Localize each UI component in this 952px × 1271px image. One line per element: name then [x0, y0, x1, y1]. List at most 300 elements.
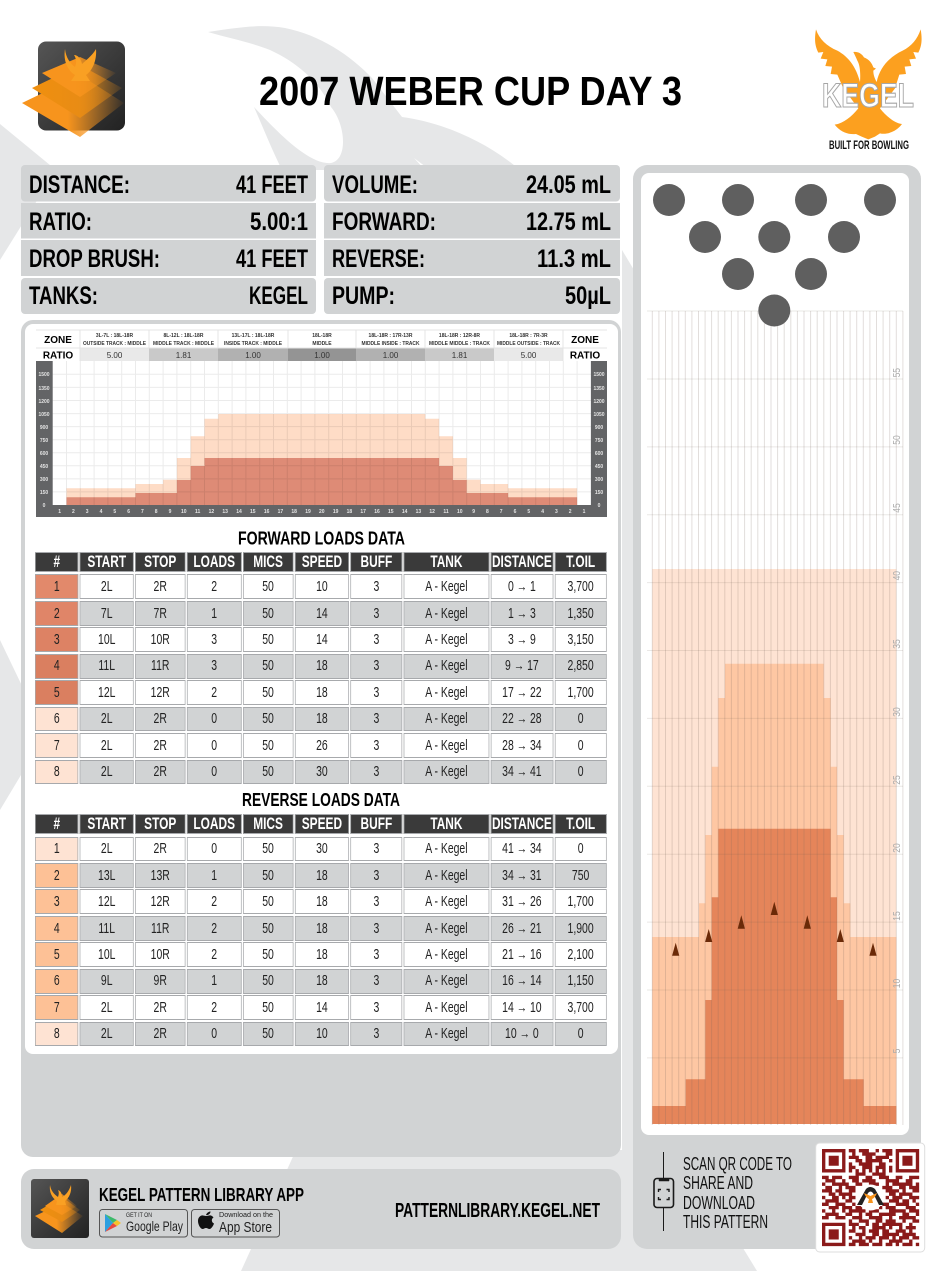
forward row 6: 0	[212, 711, 217, 727]
forward row 6: 2L	[101, 711, 113, 727]
lane distance scale: 45	[891, 503, 902, 513]
reverse row 4: 11R	[151, 921, 170, 937]
oil distribution bar chart: 18	[347, 509, 352, 515]
stats panel: pattern specs right column: 11.3 mL	[537, 245, 611, 273]
forward row 3	[35, 627, 607, 652]
forward row 1: 10	[316, 579, 328, 595]
oil distribution bar chart: 300	[595, 477, 603, 483]
zone and ratio header: 1.81	[176, 351, 192, 360]
reverse row 5: 3	[374, 947, 380, 963]
footer app icon	[31, 1179, 89, 1238]
forward table header: SPEED	[302, 553, 342, 571]
lane board lines	[652, 311, 903, 1125]
oil distribution bar chart: 1350	[593, 386, 605, 392]
oil distribution bar chart: 4	[100, 509, 103, 515]
reverse row 1: 50	[263, 841, 274, 857]
oil distribution bar chart: 19	[305, 509, 311, 515]
reverse row 2: 3	[374, 868, 380, 884]
reverse row 1: A - Kegel	[425, 841, 468, 857]
forward row 1: 50	[263, 579, 274, 595]
oil distribution bar chart: 7	[141, 509, 144, 515]
stats panel: pattern specs left column: 41 FEET	[236, 245, 308, 273]
oil distribution bar chart: 900	[40, 425, 48, 431]
forward row 4: 50	[263, 658, 274, 674]
forward row 4: 3	[212, 658, 217, 674]
oil distribution bar chart: 17	[278, 509, 283, 515]
forward row 3: 3 → 9	[508, 632, 536, 648]
oil distribution bar chart: 14	[402, 509, 408, 515]
zone and ratio header: 1.00	[245, 351, 261, 360]
reverse row 4: 2	[212, 921, 217, 937]
reverse table header: SPEED	[302, 815, 342, 833]
oil distribution bar chart: 13	[416, 509, 421, 515]
reverse table header: T.OIL	[566, 815, 595, 833]
oil distribution bar chart: 600	[595, 451, 603, 457]
oil distribution bar chart: 14	[236, 509, 242, 515]
reverse row 6: 50	[263, 973, 274, 989]
forward row 1: 0 → 1	[508, 579, 536, 595]
lane arrows	[672, 902, 877, 956]
forward row 1: A - Kegel	[425, 579, 468, 595]
forward row 2: 14	[316, 606, 328, 622]
reverse row 3: 1,700	[568, 894, 594, 910]
lane distance scale: 30	[891, 707, 902, 717]
reverse row 2: 50	[263, 868, 274, 884]
reverse row 8: 10	[316, 1026, 328, 1042]
oil distribution bar chart: 11	[195, 509, 200, 515]
oil distribution bar chart: 3	[86, 509, 89, 515]
forward row 6: 0	[578, 711, 584, 727]
reverse row 2: A - Kegel	[425, 868, 468, 884]
reverse table header: DISTANCE	[492, 815, 552, 833]
reverse row 7	[35, 995, 607, 1020]
forward row 7: 26	[316, 738, 328, 754]
reverse row 6: 9R	[154, 973, 167, 989]
zone and ratio header: ZONE	[44, 335, 72, 346]
oil distribution bar chart: 13	[222, 509, 228, 515]
reverse row 1	[35, 837, 607, 861]
forward row 2: 7R	[154, 606, 167, 622]
forward row 1: 2R	[154, 579, 167, 595]
reverse row 4: 18	[316, 921, 328, 937]
Kegel phoenix logo	[815, 29, 922, 152]
reverse row 8: 0	[212, 1026, 217, 1042]
stats panel: pattern specs right column: 50µL	[565, 282, 611, 310]
reverse table header: STOP	[144, 815, 177, 833]
stats panel: pattern specs left column: TANKS:	[29, 282, 98, 310]
reverse row 5: 5	[54, 947, 60, 963]
reverse row 3: 18	[316, 894, 328, 910]
forward row 3: 3	[374, 632, 380, 648]
oil distribution bar chart	[36, 361, 607, 517]
forward row 7: 50	[263, 738, 274, 754]
zone and ratio header: OUTSIDE TRACK : MIDDLE	[83, 341, 147, 347]
reverse row 2	[35, 863, 607, 888]
stats panel: pattern specs right column: REVERSE:	[332, 245, 425, 273]
forward row 5: 1,700	[568, 685, 594, 701]
reverse row 5: 50	[263, 947, 274, 963]
oil distribution bar chart: 12	[429, 509, 435, 515]
reverse row 4: 50	[263, 921, 274, 937]
oil distribution bar chart: 150	[595, 490, 603, 496]
reverse row 3: 12R	[151, 894, 170, 910]
badge: App Store	[192, 1210, 280, 1237]
website address: PATTERNLIBRARY.KEGEL.NET	[395, 1200, 600, 1222]
reverse row 8: 10 → 0	[505, 1026, 539, 1042]
reverse row 7: 50	[263, 1000, 274, 1016]
lane distance scale: 5	[891, 1049, 902, 1053]
oil distribution bar chart: 6	[127, 509, 130, 515]
forward row 8: A - Kegel	[425, 764, 468, 780]
stats panel: pattern specs left column: DISTANCE:	[29, 171, 130, 199]
reverse row 3: 12L	[98, 894, 116, 910]
forward row 6	[35, 707, 607, 731]
QR code instruction text: SHARE AND	[683, 1173, 753, 1193]
heading: reverse loads data: REVERSE LOADS DATA	[242, 790, 400, 810]
zone and ratio header: 1.00	[314, 351, 330, 360]
app icon: pattern library	[22, 42, 125, 137]
reverse table header: LOADS	[194, 815, 235, 833]
forward row 2: A - Kegel	[425, 606, 468, 622]
reverse row 8: 50	[263, 1026, 274, 1042]
lane distance scale: 25	[891, 775, 902, 785]
reverse row 6: 16 → 14	[502, 973, 542, 989]
reverse row 6: 3	[374, 973, 380, 989]
forward row 3: 50	[263, 632, 274, 648]
forward table header: DISTANCE	[492, 553, 552, 571]
forward row 8: 0	[212, 764, 217, 780]
zone and ratio header: 18L-18R : 17R-13R	[369, 333, 413, 339]
forward row 7: 3	[374, 738, 380, 754]
forward row 8: 50	[263, 764, 274, 780]
forward row 7: 2R	[154, 738, 167, 754]
reverse row 2: 13L	[98, 868, 116, 884]
reverse row 4: 11L	[99, 921, 115, 937]
forward table header: LOADS	[194, 553, 235, 571]
badge: Google Play: Google Play	[126, 1218, 183, 1234]
zone and ratio header: 3L-7L : 18L-18R	[96, 333, 133, 339]
QR code instruction text: THIS PATTERN	[683, 1212, 768, 1232]
QR code instruction text: DOWNLOAD	[683, 1193, 755, 1213]
reverse row 8: 2L	[101, 1026, 113, 1042]
forward row 7: 7	[54, 738, 60, 754]
oil distribution bar chart: 16	[374, 509, 380, 515]
forward row 3: 3	[212, 632, 217, 648]
reverse row 2: 750	[572, 868, 590, 884]
badge: App Store: Download on the	[219, 1212, 273, 1219]
reverse row 8: A - Kegel	[425, 1026, 468, 1042]
QR code instruction text	[683, 1154, 792, 1232]
forward row 3: 3,150	[568, 632, 594, 648]
oil distribution bar chart: 750	[40, 438, 48, 444]
forward row 2: 3	[374, 606, 380, 622]
lane distance lines	[647, 311, 903, 1058]
panel: app footer	[21, 1169, 621, 1249]
oil distribution bar chart: 20	[319, 509, 325, 515]
forward table header: BUFF	[361, 553, 393, 571]
oil distribution bar chart: 600	[40, 451, 48, 457]
forward row 6: 6	[54, 711, 60, 727]
reverse row 5: 2,100	[568, 947, 594, 963]
forward row 2: 2	[54, 606, 60, 622]
badge: App Store: App Store	[219, 1219, 272, 1236]
panel: lane white card	[641, 173, 909, 1135]
oil distribution bar chart: 450	[595, 464, 603, 470]
zone and ratio header: 18L-18R	[312, 333, 332, 339]
forward row 1: 2	[212, 579, 217, 595]
reverse row 7: 3,700	[568, 1000, 594, 1016]
oil distribution bar chart: 9	[472, 509, 475, 515]
forward row 2: 7L	[101, 606, 113, 622]
oil distribution bar chart: 4	[541, 509, 544, 515]
reverse row 3: 50	[263, 894, 274, 910]
forward row 2: 1,350	[568, 606, 594, 622]
oil distribution bar chart: 16	[264, 509, 270, 515]
stats panel: pattern specs left column: KEGEL	[249, 282, 308, 310]
QR code instruction text: SCAN QR CODE TO	[683, 1154, 792, 1174]
reverse table header: START	[88, 815, 126, 833]
forward row 2: 1 → 3	[508, 606, 536, 622]
reverse row 4: 1,900	[568, 921, 594, 937]
reverse row 5	[35, 942, 607, 967]
forward row 6: 22 → 28	[502, 711, 542, 727]
oil distribution bar chart: 17	[360, 509, 366, 515]
reverse table header: TANK	[431, 815, 463, 833]
lane distance scale	[891, 368, 902, 1053]
reverse row 2: 2	[54, 868, 60, 884]
oil distribution bar chart: 15	[250, 509, 256, 515]
forward row 6: 18	[316, 711, 328, 727]
reverse row 6: A - Kegel	[425, 973, 468, 989]
forward row 7: 0	[212, 738, 217, 754]
forward row 1: 3,700	[568, 579, 594, 595]
zone and ratio header: 18L-18R : 7R-3R	[509, 333, 548, 339]
QR code	[816, 1143, 925, 1252]
forward table header	[35, 552, 607, 572]
lane distance scale: 55	[891, 368, 902, 377]
forward row 3: 14	[316, 632, 328, 648]
oil pattern on lane	[652, 569, 896, 1124]
forward row 5: 50	[263, 685, 274, 701]
reverse row 3: 31 → 26	[502, 894, 542, 910]
oil distribution bar chart: 12	[209, 509, 214, 515]
reverse row 2: 1	[212, 868, 217, 884]
reverse row 1: 0	[212, 841, 217, 857]
zone and ratio header: MIDDLE MIDDLE : TRACK	[429, 341, 490, 347]
forward row 5: A - Kegel	[425, 685, 468, 701]
reverse row 7: A - Kegel	[425, 1000, 468, 1016]
forward row 5	[35, 680, 607, 705]
reverse table header: #	[54, 815, 60, 833]
lane distance scale: 40	[891, 571, 902, 580]
reverse row 5: 10L	[98, 947, 116, 963]
forward row 8: 8	[54, 764, 60, 780]
forward row 4: A - Kegel	[425, 658, 468, 674]
zone and ratio header: 5.00	[107, 351, 123, 360]
oil distribution bar chart: 10	[457, 509, 463, 515]
forward row 5: 5	[54, 685, 60, 701]
zone and ratio header: ZONE	[571, 335, 599, 346]
zone and ratio header: MIDDLE OUTSIDE : TRACK	[497, 341, 560, 347]
zone and ratio header: INSIDE TRACK : MIDDLE	[224, 341, 283, 347]
forward row 8: 34 → 41	[502, 764, 542, 780]
zone and ratio header: 1.00	[383, 351, 399, 360]
reverse row 6: 1,150	[568, 973, 594, 989]
oil distribution bar chart: 2	[569, 509, 572, 515]
lane distance scale: 20	[891, 843, 902, 853]
zone and ratio header: 13L-17L : 18L-18R	[232, 333, 275, 339]
zone and ratio header: RATIO	[570, 350, 600, 362]
forward row 8: 0	[578, 764, 584, 780]
zone and ratio header: 18L-18R : 12R-8R	[439, 333, 480, 339]
reverse row 7: 2R	[154, 1000, 167, 1016]
stats panel: pattern specs left column: 5.00:1	[250, 208, 308, 236]
reverse row 8	[35, 1022, 607, 1046]
forward row 1: 3	[374, 579, 380, 595]
oil distribution bar chart: 150	[40, 490, 48, 496]
reverse row 4: 26 → 21	[502, 921, 542, 937]
forward row 2	[35, 601, 607, 626]
oil distribution bar chart: 8	[155, 509, 158, 515]
reverse row 2: 13R	[151, 868, 170, 884]
oil distribution bar chart: 900	[595, 425, 603, 431]
zone and ratio header: MIDDLE INSIDE : TRACK	[362, 341, 420, 347]
forward row 7: A - Kegel	[425, 738, 468, 754]
reverse row 4: 3	[374, 921, 380, 937]
bowling pins	[653, 184, 896, 326]
reverse table header: MICS	[254, 815, 283, 833]
oil distribution bar chart: 1500	[593, 372, 605, 378]
reverse row 1: 30	[316, 841, 328, 857]
reverse row 3: 3	[374, 894, 380, 910]
forward row 3: 10R	[151, 632, 170, 648]
badge: Google Play: GET IT ON	[126, 1213, 152, 1219]
stats panel: pattern specs left column	[21, 165, 316, 314]
reverse row 7: 2L	[101, 1000, 113, 1016]
forward row 1: 1	[54, 579, 60, 595]
reverse row 5: 18	[316, 947, 328, 963]
zone and ratio header: 8L-12L : 18L-18R	[164, 333, 204, 339]
oil distribution bar chart: 450	[40, 464, 48, 470]
oil distribution bar chart: 1500	[38, 372, 50, 378]
Kegel phoenix logo: BUILT FOR BOWLING	[829, 140, 909, 152]
zone and ratio header: MIDDLE TRACK : MIDDLE	[153, 341, 215, 347]
stats panel: pattern specs right column: PUMP:	[332, 282, 395, 310]
forward table header: START	[88, 553, 126, 571]
oil distribution bar chart: 5	[113, 509, 116, 515]
stats panel: pattern specs left column: RATIO:	[29, 208, 92, 236]
forward row 8: 2L	[101, 764, 113, 780]
oil distribution bar chart: 2	[72, 509, 75, 515]
icon: phone scan	[654, 1152, 674, 1231]
reverse row 6: 1	[212, 973, 217, 989]
reverse table header: BUFF	[361, 815, 393, 833]
forward row 4: 9 → 17	[505, 658, 539, 674]
forward row 7: 0	[578, 738, 584, 754]
forward row 5: 18	[316, 685, 328, 701]
reverse row 1: 2L	[101, 841, 113, 857]
reverse row 7: 2	[212, 1000, 217, 1016]
oil distribution bar chart: 300	[40, 477, 48, 483]
forward row 4: 11L	[99, 658, 115, 674]
forward row 4: 3	[374, 658, 380, 674]
oil distribution bar chart: 1	[58, 509, 61, 515]
reverse row 3: 3	[54, 894, 60, 910]
forward row 8: 30	[316, 764, 328, 780]
reverse loads table	[35, 814, 607, 1046]
panel: data background	[21, 320, 621, 1157]
reverse row 5: A - Kegel	[425, 947, 468, 963]
reverse row 1: 1	[54, 841, 60, 857]
zone and ratio header	[36, 330, 607, 362]
stats panel: pattern specs left column: DROP BRUSH:	[29, 245, 160, 273]
reverse row 5: 2	[212, 947, 217, 963]
forward row 5: 3	[374, 685, 380, 701]
oil distribution bar chart: 9	[169, 509, 172, 515]
oil distribution bar chart: 11	[443, 509, 449, 515]
Kegel phoenix logo: KEGEL	[822, 77, 914, 115]
forward row 2: 50	[263, 606, 274, 622]
forward row 5: 2	[212, 685, 217, 701]
forward row 3: 10L	[98, 632, 116, 648]
stats panel: pattern specs right column: FORWARD:	[332, 208, 436, 236]
reverse row 6: 9L	[101, 973, 113, 989]
reverse row 4: 4	[54, 921, 60, 937]
forward row 5: 12L	[98, 685, 116, 701]
forward row 4: 4	[54, 658, 60, 674]
oil distribution bar chart: 1350	[38, 386, 50, 392]
oil distribution bar chart: 8	[486, 509, 489, 515]
oil distribution bar chart: 6	[514, 509, 517, 515]
background watermark swooshes	[0, 26, 757, 1271]
forward row 7	[35, 733, 607, 758]
oil distribution bar chart: 0	[598, 503, 601, 509]
stats panel: pattern specs right column: 12.75 mL	[526, 208, 611, 236]
stats panel: pattern specs left column: 41 FEET	[236, 171, 308, 199]
forward row 5: 12R	[151, 685, 170, 701]
forward row 7: 2L	[101, 738, 113, 754]
forward table header: TANK	[431, 553, 463, 571]
reverse row 7: 14 → 10	[502, 1000, 542, 1016]
stats panel: pattern specs right column: 24.05 mL	[526, 171, 611, 199]
oil distribution bar chart: 1050	[593, 412, 605, 418]
forward loads table	[35, 552, 607, 784]
forward row 5: 17 → 22	[502, 685, 542, 701]
lane distance scale: 10	[891, 979, 902, 988]
oil distribution bar chart: 15	[388, 509, 394, 515]
oil distribution bar chart: 5	[527, 509, 530, 515]
oil distribution bar chart: 18	[291, 509, 297, 515]
reverse row 8: 2R	[154, 1026, 167, 1042]
forward row 6: 50	[263, 711, 274, 727]
forward row 6: A - Kegel	[425, 711, 468, 727]
forward row 4	[35, 654, 607, 679]
panel: lane outer	[633, 165, 921, 1249]
forward row 3: 3	[54, 632, 60, 648]
forward row 3: A - Kegel	[425, 632, 468, 648]
reverse row 4	[35, 916, 607, 941]
reverse row 3	[35, 889, 607, 914]
forward row 1	[35, 574, 607, 599]
reverse row 5: 21 → 16	[502, 947, 542, 963]
stats panel: pattern specs right column	[324, 165, 620, 314]
reverse row 5: 10R	[151, 947, 170, 963]
forward row 2: 1	[212, 606, 217, 622]
lane distance scale: 15	[891, 911, 902, 921]
lane distance scale: 50	[891, 435, 902, 445]
reverse row 8: 3	[374, 1026, 380, 1042]
app heading: KEGEL PATTERN LIBRARY APP	[99, 1185, 304, 1205]
